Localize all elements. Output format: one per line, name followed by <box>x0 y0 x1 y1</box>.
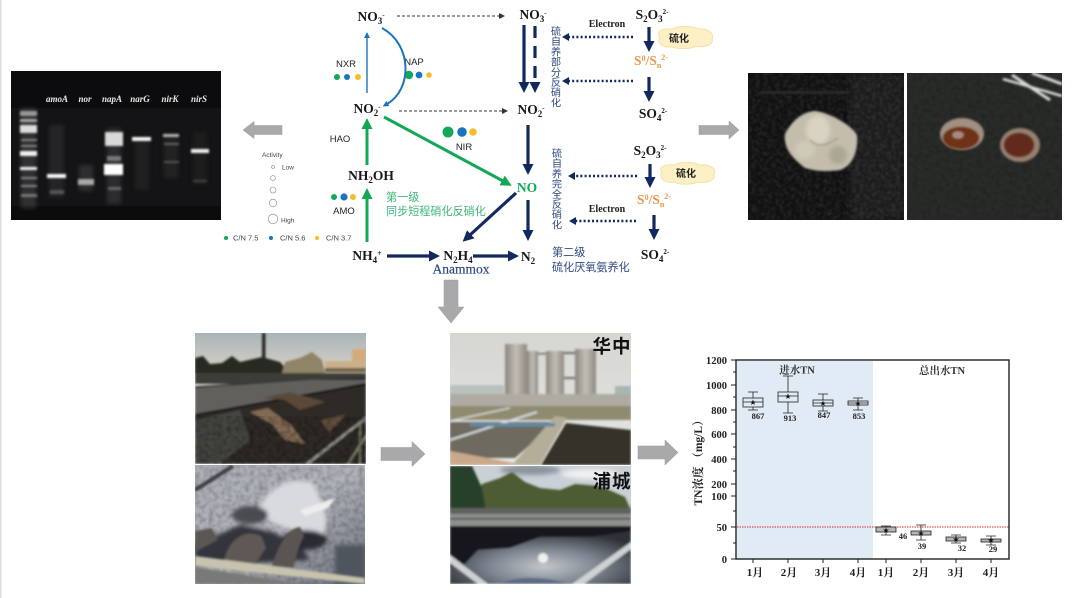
sulfur species top: SO <box>639 106 657 121</box>
y axis values <box>706 356 727 566</box>
left nitrogen species: - <box>382 11 385 19</box>
mean stars: ★ <box>987 536 995 545</box>
left nitrogen species: 3 <box>378 16 383 26</box>
x axis months: 2月 <box>781 566 797 579</box>
vertical label: complete denitrification: 硫自养完全反硝化 <box>550 147 562 230</box>
sulfur species bottom: 2- <box>661 144 667 152</box>
sulfur species top: 2- <box>661 107 668 115</box>
left nitrogen species: 2 <box>374 108 379 118</box>
x axis months: 1月 <box>878 566 894 579</box>
x axis months: 2月 <box>913 566 929 579</box>
influent boxes <box>743 376 868 413</box>
sulfur species top: 2- <box>661 53 668 62</box>
effluent boxes <box>876 525 1001 545</box>
middle nitrogen species: NO <box>519 7 540 22</box>
enzyme labels: NIR <box>456 142 472 153</box>
sulfur species bottom: 4 <box>659 254 664 264</box>
y axis values: 1000 <box>706 381 727 392</box>
left nitrogen species: 2 <box>368 175 373 185</box>
enzyme activity dots <box>331 71 477 201</box>
arrow: plants to chart <box>638 440 678 465</box>
middle nitrogen species <box>432 7 547 276</box>
activity size legend <box>262 152 295 224</box>
label: Huazhong: 华中 <box>592 336 632 357</box>
left nitrogen species: NH <box>352 248 373 263</box>
stage one label: 同步短程硝化反硝化 <box>386 204 486 218</box>
photo: Huazhong plant <box>450 333 631 465</box>
arrow: diagram to plants <box>438 280 464 323</box>
left nitrogen species <box>348 9 394 265</box>
sulfur species bottom: SO <box>641 247 659 262</box>
y axis values: 800 <box>711 406 727 417</box>
C/N colour legend <box>224 234 351 242</box>
sulfur species top: S <box>634 53 642 68</box>
y axis values: 200 <box>711 480 727 491</box>
y axis values: 1200 <box>706 356 727 367</box>
cloud bottom: 硫化 <box>676 167 696 180</box>
sulfur species bottom: 2- <box>663 248 670 256</box>
y axis values: 0 <box>722 555 727 566</box>
nitrogen sulfur pathway diagram <box>330 7 715 276</box>
navy denitrification arrows <box>387 25 654 256</box>
stage one label: 第一级 <box>386 190 419 204</box>
left nitrogen species: 4 <box>373 255 378 265</box>
gel lane labels: nirS <box>191 94 207 104</box>
sulfur species top: 4 <box>657 113 662 123</box>
chart frame and ticks <box>731 360 1009 563</box>
mean values: 847 <box>818 410 831 420</box>
middle nitrogen species: NO <box>517 180 537 195</box>
sulfur species bottom: 2 <box>641 150 646 160</box>
photo: Pucheng plant <box>450 465 631 584</box>
enzyme labels: NAP <box>404 57 424 68</box>
sulfur species top: Electron <box>589 19 626 30</box>
mean stars: ★ <box>784 392 792 401</box>
mean values: 29 <box>989 544 997 554</box>
gel lane labels: amoA <box>46 94 68 104</box>
mean values: 913 <box>784 413 796 423</box>
middle nitrogen species: NO <box>517 102 538 117</box>
C/N colour legend: C/N 3.7 <box>326 234 351 242</box>
gel lane labels <box>46 94 207 104</box>
y axis values: 50 <box>716 523 727 534</box>
y axis values: 600 <box>711 430 727 441</box>
left nitrogen species: NO <box>353 101 374 116</box>
mean stars <box>749 392 995 545</box>
sulfur species top: 0 <box>642 54 646 63</box>
sulfur species top: /S <box>645 53 657 68</box>
left nitrogen species: NO <box>357 9 378 24</box>
middle nitrogen species: 2 <box>531 256 536 266</box>
photo: cut granules <box>907 73 1062 220</box>
enzyme labels <box>330 57 472 217</box>
sulfur species top: 2 <box>643 14 648 24</box>
sulfur species bottom: O <box>646 143 656 158</box>
stage two label: 第二级 <box>552 245 585 259</box>
cloud top: 硫化 <box>669 32 689 45</box>
sulfur species top: S <box>636 7 643 22</box>
x axis months: 3月 <box>815 566 831 579</box>
middle nitrogen species: 3 <box>540 14 545 24</box>
photo: foam aeration tank <box>195 465 365 584</box>
activity size legend: Activity <box>262 152 283 159</box>
panel titles: 总出水TN <box>919 364 965 377</box>
panel titles <box>779 364 965 377</box>
sulfur species bottom: /S <box>648 192 660 207</box>
sulfur species bottom <box>589 143 671 264</box>
sulfur species bottom: 2- <box>664 192 671 201</box>
sulfur species top: n <box>657 61 662 70</box>
middle nitrogen species: N <box>521 249 531 264</box>
gel lane labels: nirK <box>161 94 180 104</box>
sulfur species bottom: 0 <box>645 193 649 202</box>
gel electrophoresis photo <box>11 71 221 220</box>
box plot chart: TN concentration <box>691 356 1009 579</box>
y axis values: 400 <box>711 455 727 466</box>
mean values: 853 <box>853 411 865 421</box>
middle nitrogen species: 2 <box>538 109 543 119</box>
stage two label: 硫化厌氧氨养化 <box>552 260 630 274</box>
middle nitrogen species: 4 <box>468 255 473 265</box>
mean values: 39 <box>918 541 926 551</box>
y axis values: 100 <box>711 492 727 503</box>
middle nitrogen species: Anammox <box>432 262 490 276</box>
gel bands <box>20 111 209 197</box>
gel lane labels: narG <box>130 94 150 104</box>
middle nitrogen species: H <box>458 248 469 263</box>
gel lane smears <box>21 108 207 208</box>
photo: sludge tank <box>195 333 366 464</box>
green nitrification arrows <box>367 117 503 242</box>
activity size legend: High <box>281 218 295 224</box>
middle nitrogen species: - <box>544 9 547 17</box>
left nitrogen species: + <box>377 249 382 258</box>
left nitrogen species: NH <box>348 168 368 183</box>
middle nitrogen species: N <box>443 248 453 263</box>
blue NXR and NAP arrows <box>367 28 406 104</box>
x axis months: 4月 <box>983 566 999 579</box>
enzyme labels: AMO <box>333 206 355 217</box>
sulfur species bottom: S <box>634 143 641 158</box>
arrow: to granule photos <box>699 121 739 139</box>
50 mg/L limit line <box>737 526 1009 528</box>
sulfur species bottom: n <box>660 200 665 209</box>
x axis months: 3月 <box>948 566 964 579</box>
middle nitrogen species: - <box>542 104 545 112</box>
x axis months <box>747 566 999 579</box>
cloud bottom <box>661 162 715 184</box>
sulfur species top <box>589 7 669 123</box>
sulfur species top: 2- <box>663 8 669 16</box>
sulfur species top: O <box>648 7 658 22</box>
sulfur species bottom: S <box>637 192 645 207</box>
x axis months: 1月 <box>747 566 763 579</box>
left nitrogen species: OH <box>373 168 394 183</box>
x axis months: 4月 <box>850 566 866 579</box>
left nitrogen species: - <box>378 103 381 111</box>
sulfur species bottom: 3 <box>656 150 661 160</box>
mean stars: ★ <box>917 529 925 538</box>
gel lane labels: napA <box>102 94 122 104</box>
mean values: 46 <box>899 531 907 541</box>
arrow: tanks to plants <box>381 442 425 466</box>
vertical label: partial denitrification: 硫自养部分反硝化 <box>548 25 561 108</box>
sulfur species top: 3 <box>658 14 663 24</box>
photo: whole granule <box>748 73 904 220</box>
mean stars: ★ <box>952 535 960 544</box>
mean stars: ★ <box>749 398 757 407</box>
enzyme labels: HAO <box>330 134 350 145</box>
mean stars: ★ <box>882 526 890 535</box>
middle nitrogen species: 2 <box>453 255 458 265</box>
C/N colour legend: C/N 7.5 <box>233 234 258 242</box>
mean values <box>752 410 997 554</box>
sulfur species bottom: Electron <box>589 204 626 215</box>
gel lane labels: nor <box>78 94 92 104</box>
mean values: 32 <box>958 543 966 553</box>
mean stars: ★ <box>819 399 827 408</box>
y axis title: TN浓度 （mg/L） <box>691 414 705 506</box>
arrow: to gel photo <box>243 122 282 138</box>
C/N colour legend: C/N 5.6 <box>280 234 305 242</box>
activity size legend: Low <box>282 164 294 172</box>
cloud top <box>659 26 713 49</box>
panel titles: 进水TN <box>779 364 815 376</box>
influent panel shading <box>737 361 873 559</box>
enzyme labels: NXR <box>336 59 356 70</box>
mean values: 867 <box>752 411 765 421</box>
navy electron dotted arrows <box>568 37 637 221</box>
label: Pucheng: 浦城 <box>592 471 632 492</box>
black dashed arrows <box>397 16 503 111</box>
mean stars: ★ <box>854 399 862 408</box>
